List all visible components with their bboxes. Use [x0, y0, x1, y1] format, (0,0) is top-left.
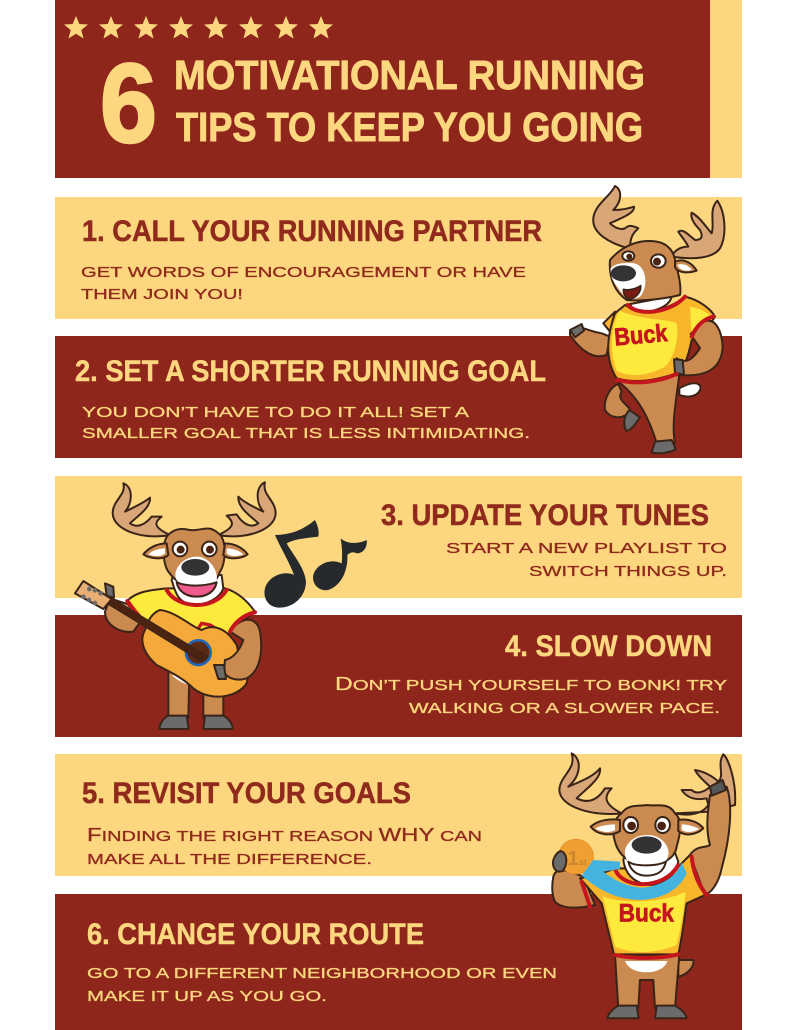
icon: medal deer mascot: [552, 753, 735, 1018]
text: tip 4 body: D ON’T PUSH YOURSELF TO BONK! TRY: [335, 674, 727, 694]
text: tip 5 body: FINDING THE RIGHT REASON WHY CAN: [87, 825, 482, 845]
heading: tip 5: 5. REVISIT YOUR GOALS: [82, 777, 411, 810]
panel: tip 3: [55, 476, 742, 598]
text: tip 3 body: [446, 540, 727, 580]
text: tip 5 body: MAKE ALL THE DIFFERENCE.: [87, 851, 372, 868]
icon: running deer mascot: [570, 186, 724, 453]
text: tip 3 body: START A NEW PLAYLIST TO: [446, 540, 727, 557]
text: tip 2 body: SMALLER GOAL THAT IS LESS INTIMIDATING.: [82, 425, 530, 442]
label: medal text: 1st: [567, 847, 587, 870]
title number: 6: [100, 41, 157, 166]
panel: tip 6: [55, 894, 742, 1030]
text: tip 5 body: [87, 825, 482, 868]
title: TIPS TO KEEP YOU GOING: [176, 104, 643, 150]
heading: tip 1: 1. CALL YOUR RUNNING PARTNER: [82, 215, 542, 248]
text: tip 2 body: YOU DON’T HAVE TO DO IT ALL! SET A: [82, 404, 469, 421]
title: MOTIVATIONAL RUNNING: [174, 52, 645, 98]
heading: tip 3: 3. UPDATE YOUR TUNES: [381, 499, 709, 532]
text: tip 6 body: GO TO A DIFFERENT NEIGHBORHOOD OR EVEN: [87, 965, 557, 982]
text: tip 3 body: SWITCH THINGS UP.: [529, 563, 727, 580]
text: tip 4 body: [335, 674, 727, 717]
heading: tip 6: 6. CHANGE YOUR ROUTE: [87, 918, 424, 951]
label: shirt text: Buck: [619, 900, 674, 927]
icon: row of stars: [64, 16, 333, 38]
panel: tip 4: [55, 615, 742, 737]
text: tip 6 body: MAKE IT UP AS YOU GO.: [87, 988, 327, 1005]
label: shirt text: Buck: [613, 320, 669, 352]
text: tip 6 body: [87, 965, 557, 1005]
icon: music notes: [264, 520, 367, 608]
title: [174, 52, 645, 150]
panel: tip 2: [55, 336, 742, 458]
text: tip 1 body: GET WORDS OF ENCOURAGEMENT OR HAVE: [81, 264, 526, 281]
text: tip 2 body: [82, 404, 530, 442]
panel: tip 5: [55, 754, 742, 876]
text: tip 4 body: WALKING OR A SLOWER PACE.: [409, 700, 720, 717]
panel: header: [55, 0, 742, 178]
heading: tip 4: 4. SLOW DOWN: [505, 630, 712, 663]
text: tip 1 body: [81, 264, 526, 303]
icon: guitar deer mascot: [75, 482, 276, 729]
text: tip 1 body: THEM JOIN YOU!: [81, 286, 243, 303]
heading: tip 2: 2. SET A SHORTER RUNNING GOAL: [75, 355, 546, 388]
panel: tip 1: [55, 197, 742, 319]
